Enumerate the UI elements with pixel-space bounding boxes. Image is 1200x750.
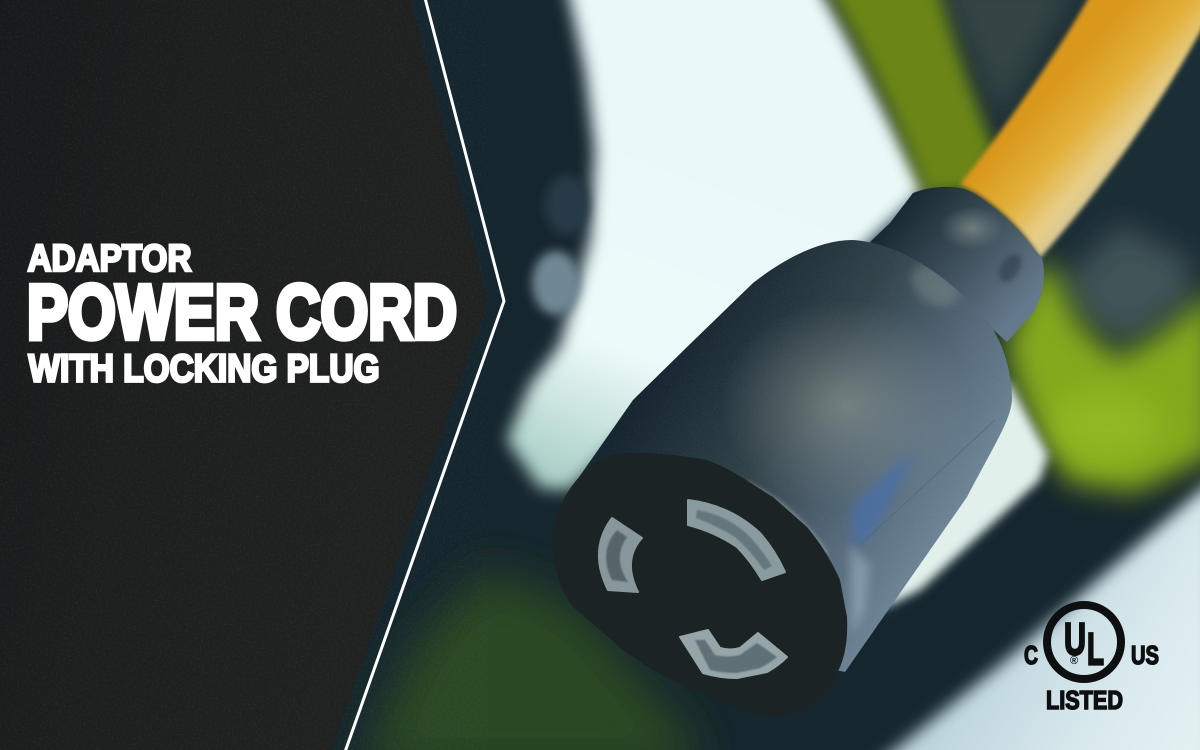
title [27,238,457,390]
background: bright green core [1050,390,1160,460]
background: upper right dark [930,0,1200,330]
background: green cord upper [815,0,995,195]
background: pale light area [507,0,925,490]
plug: blue reflection [850,455,915,550]
logo letter U: U [1064,614,1086,664]
plug shell [570,235,1020,680]
logo letters us: US [1131,640,1159,670]
plug face [553,453,847,717]
title line: power cord: POWER CORD [27,270,457,356]
background: blurred dots [532,251,580,315]
left panel with chevron edge [0,0,488,750]
logo letter L: L [1087,624,1104,674]
background: dark green bottom [360,570,700,750]
logo word listed: LISTED [1046,685,1123,715]
plug slot: bottom [680,630,787,678]
background: pale patch below plug [880,380,1048,610]
UL listed logo [1024,605,1159,715]
logo letter c: C [1024,640,1038,670]
plug: rim highlight [745,485,825,555]
title line: with locking plug: WITH LOCKING PLUG [28,348,380,390]
chevron white line [345,0,504,750]
plug: highlight [736,316,938,488]
title line: adaptor: ADAPTOR [28,238,192,280]
plug: seam line [860,420,995,545]
yellow cord [960,0,1200,258]
background: green cord lower blob [1005,262,1200,493]
background: greyish teal glow under yellow cord [1065,225,1190,345]
plug: grain [586,240,1010,662]
plug body [553,180,1050,717]
plug slot: top right [688,500,785,580]
logo registered mark: ® [1070,655,1078,667]
plug slot: left [599,518,642,592]
plug: shoulder highlight [909,263,960,308]
plug neck [870,186,1044,342]
plug: pale reflection [850,545,870,635]
logo ring [1047,605,1121,679]
background: bottom right light area [870,478,1200,750]
background: greyish teal glow left of yellow cord [935,0,1080,120]
